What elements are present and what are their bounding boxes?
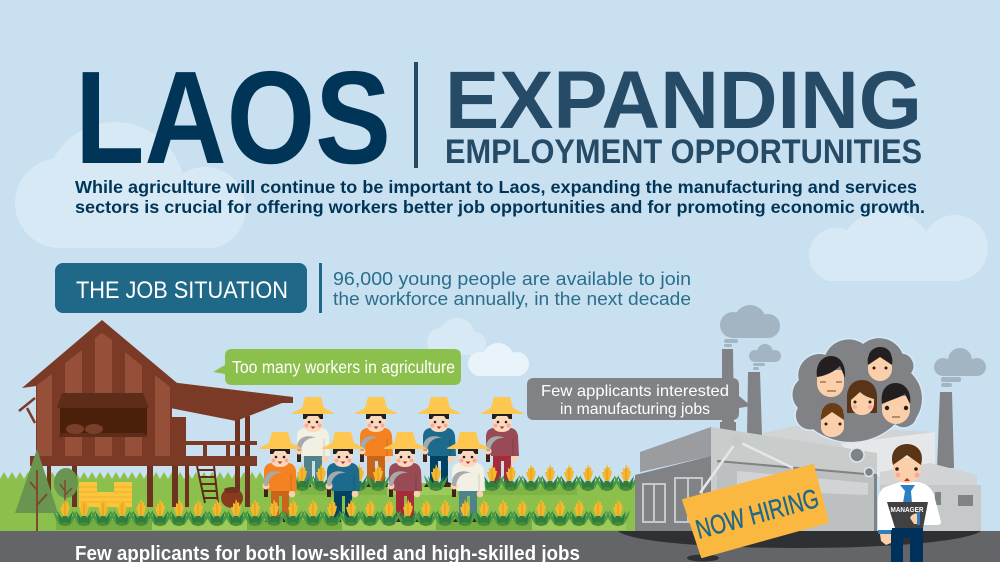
- manager cuff: [878, 530, 891, 534]
- introduction text: While agriculture will continue to be important to Laos, expanding the manufacturing and services: [75, 177, 917, 197]
- face: young man: [868, 347, 892, 381]
- left side brace: [19, 398, 35, 423]
- job situation statistic: [333, 269, 691, 309]
- road: [0, 531, 1000, 562]
- main wall: [711, 427, 877, 531]
- section divider: [319, 263, 322, 313]
- title divider: [414, 62, 418, 168]
- manager tie: [900, 485, 915, 503]
- face: man moustache: [882, 383, 910, 424]
- wall planks: [37, 333, 170, 456]
- callout: few applicants: in manufacturing jobs: [560, 401, 710, 418]
- left wing wall: [635, 456, 711, 531]
- clay pot: [221, 487, 243, 508]
- side windows: [935, 492, 973, 506]
- title: Laos: LAOS: [75, 44, 391, 191]
- manager head: [893, 458, 921, 483]
- chimneys: [720, 349, 954, 468]
- railing: [170, 441, 257, 457]
- callout: too many workers: [213, 349, 461, 385]
- job situation statistic: the workforce annually, in the next decade: [333, 289, 691, 309]
- face: man sleeping: [817, 356, 845, 397]
- deck: [30, 456, 257, 466]
- callout: few applicants: Few applicants interested: [541, 383, 729, 400]
- right wing: [880, 463, 981, 531]
- back row farmers: [292, 397, 523, 487]
- title: Expanding: EXPANDING: [445, 55, 922, 146]
- manager clipboard: MANAGER: [890, 505, 924, 514]
- window opening: [60, 407, 147, 435]
- door: [170, 417, 186, 456]
- house wall and roof: [22, 320, 177, 462]
- small cloud pale: [427, 318, 486, 356]
- baskets in window: [66, 424, 103, 434]
- manager shirt: [878, 482, 941, 530]
- section heading: the job situation: THE JOB SITUATION: [76, 277, 288, 304]
- loading bay: [717, 461, 877, 531]
- applicant faces: [817, 347, 910, 437]
- window sill: [58, 433, 148, 437]
- ground and field: [0, 472, 636, 531]
- manager eyes and cheeks: [895, 467, 920, 481]
- ladder: [197, 466, 218, 503]
- callout: too many workers: Too many workers in agriculture: [232, 357, 455, 377]
- sign hook: [731, 435, 743, 447]
- house stilts: [47, 416, 250, 507]
- section heading: the job situation: [55, 263, 307, 313]
- hay bales: [79, 482, 132, 507]
- porch roof: [170, 382, 293, 421]
- manager: [878, 444, 941, 562]
- job situation statistic: 96,000 young people are available to join: [333, 269, 691, 289]
- sign shadow: [687, 554, 719, 562]
- now hiring sign: NOW HIRING: [693, 483, 822, 545]
- factory shadow: [618, 531, 981, 548]
- callout: few applicants: [527, 378, 751, 420]
- manager trousers: [891, 526, 923, 562]
- stilt house: [19, 320, 293, 508]
- introduction text: [75, 177, 925, 217]
- now hiring sign: [683, 465, 828, 557]
- left wing roof: [640, 427, 711, 472]
- windows: [643, 478, 702, 522]
- manager right cuff: [917, 512, 920, 525]
- small cloud white: [468, 343, 529, 376]
- manager left hand: [910, 513, 919, 524]
- round tree: [54, 468, 78, 505]
- face: boy: [821, 403, 844, 437]
- introduction text: sectors is crucial for offering workers better job opportunities and for promoting economic growth.: [75, 197, 925, 217]
- large thought dot: [850, 448, 864, 462]
- front row rice plants: [53, 499, 630, 526]
- title: Employment Opportunities: EMPLOYMENT OPPORTUNITIES: [445, 133, 922, 171]
- triangle tree: [15, 449, 58, 531]
- smokestack clouds: [720, 305, 986, 387]
- factory: [635, 426, 981, 531]
- back row rice plants: [290, 464, 638, 491]
- background cloud left: [15, 122, 246, 248]
- face: woman: [847, 380, 877, 415]
- small thought dot: [864, 468, 874, 476]
- background cloud right: [809, 210, 988, 281]
- front row farmers: [259, 432, 489, 522]
- rear building: [763, 426, 935, 478]
- manager hair: [892, 444, 922, 465]
- window awning: [57, 393, 149, 408]
- sign hanging wires: [700, 441, 793, 493]
- thought bubble: [792, 337, 923, 443]
- manager hand: [880, 534, 891, 545]
